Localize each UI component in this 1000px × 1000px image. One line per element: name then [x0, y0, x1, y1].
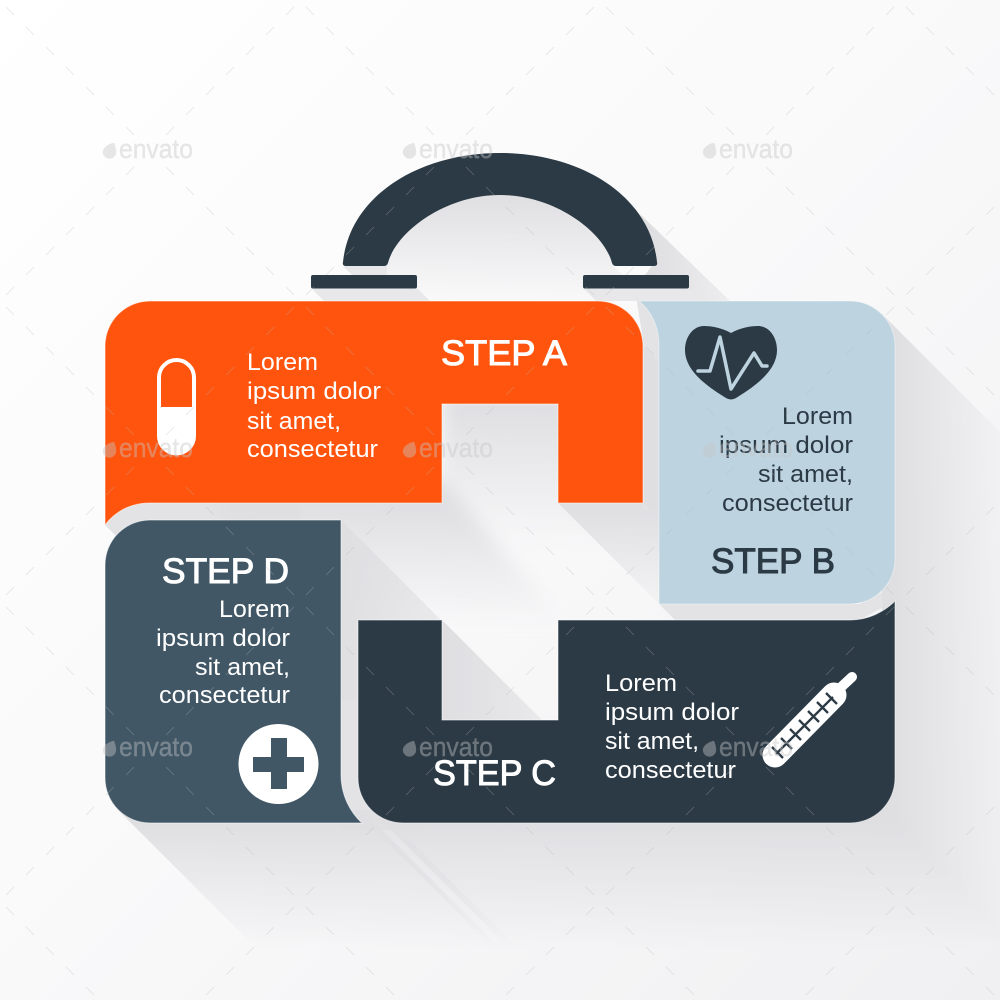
envato watermarks: envato — [419, 134, 493, 164]
envato watermarks: envato — [719, 134, 793, 164]
step B body text: consectetur — [722, 490, 853, 517]
panel: step B — [639, 301, 895, 604]
step D body text: sit amet, — [195, 654, 290, 681]
panel: step A — [105, 301, 643, 525]
envato watermarks: envato — [719, 433, 793, 463]
envato watermarks — [103, 134, 793, 762]
icon: medical cross in circle — [238, 724, 318, 804]
step C body text: ipsum dolor — [605, 699, 739, 726]
right handle bar — [583, 275, 689, 288]
step C body text: sit amet, — [605, 728, 699, 755]
step D body text: Lorem — [219, 596, 290, 623]
icon: heart with pulse — [685, 326, 777, 400]
step A body text: ipsum dolor — [247, 378, 381, 405]
step C body text — [605, 670, 739, 784]
step B body text: sit amet, — [758, 461, 853, 488]
step B heading: STEP B — [711, 542, 835, 581]
icon: pill — [159, 360, 194, 454]
step B body text — [719, 403, 853, 517]
panel: step C — [358, 601, 895, 823]
step D body text — [156, 596, 290, 709]
step A body text — [247, 349, 381, 463]
icon: thermometer — [772, 677, 852, 758]
envato watermarks: envato — [119, 134, 193, 164]
step D body text: consectetur — [159, 682, 290, 709]
envato watermarks: envato — [719, 732, 793, 762]
long shadows — [105, 195, 1000, 960]
step C body text: Lorem — [605, 670, 677, 697]
step D body text: ipsum dolor — [156, 625, 290, 652]
step A heading: STEP A — [441, 334, 568, 373]
handle of the case — [311, 153, 689, 288]
step C heading: STEP C — [433, 754, 556, 793]
step A body text: Lorem — [247, 349, 318, 376]
handle arch — [343, 153, 657, 266]
step D heading: STEP D — [162, 552, 289, 591]
step B body text: ipsum dolor — [719, 432, 853, 459]
left handle bar — [311, 275, 417, 288]
envato watermarks: envato — [419, 433, 493, 463]
panel: step D — [105, 520, 362, 823]
step A body text: consectetur — [247, 436, 378, 463]
envato watermarks: envato — [419, 732, 493, 762]
step A body text: sit amet, — [247, 408, 341, 435]
envato watermarks: envato — [119, 433, 193, 463]
step C body text: consectetur — [605, 757, 736, 784]
envato watermarks: envato — [119, 732, 193, 762]
step B body text: Lorem — [782, 403, 853, 430]
